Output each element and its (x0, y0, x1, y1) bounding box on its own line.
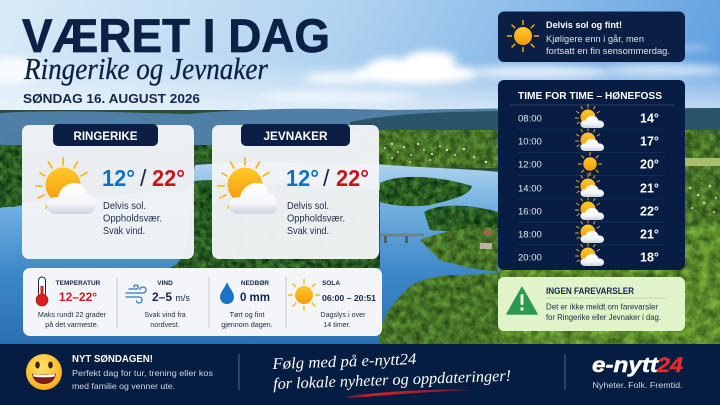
label: Jevnaker (241, 124, 350, 146)
description: Svak vind. (103, 225, 145, 237)
text: Sunday tip: Perfekt dag for tur, trening eller kos (72, 368, 213, 378)
icon: sun (288, 280, 320, 310)
rows: 18:00 (518, 230, 542, 240)
title: VÆRET I DAG (22, 10, 330, 63)
stat: sun: Dagslys i over (320, 310, 366, 319)
panel: summary (498, 12, 685, 62)
stat: sun (288, 280, 376, 329)
stat: wind: nordvest. (150, 320, 180, 329)
stat: wind: 2–5 m/s (152, 290, 190, 304)
stat: precipitation: Tørt og fint (230, 310, 264, 319)
description: Delvis sol. (103, 200, 146, 212)
icon: wind (126, 285, 146, 303)
temperatures: 22° (336, 165, 369, 191)
temperatures: 21° (640, 182, 659, 196)
icons: weather per hour (576, 104, 604, 266)
temperatures: 20° (640, 158, 659, 172)
icon: water drop (220, 282, 234, 304)
subtitle: Ringerike og Jevnaker (23, 51, 269, 86)
temperatures: 14° (640, 112, 659, 126)
label: Jevnaker: JEVNAKER (264, 131, 328, 143)
panel: hourly forecast: TIME FOR TIME – HØNEFOSS (518, 91, 662, 102)
land base (0, 110, 720, 345)
text: Sunday tip: med familie og venner ute. (72, 381, 175, 391)
temperatures: 12° (286, 165, 319, 191)
fields and town, far shore (360, 130, 500, 168)
stat: temperature: på det varmeste. (45, 320, 99, 329)
temperatures: 17° (640, 134, 659, 148)
label: Ringerike: RINGERIKE (74, 131, 138, 143)
description (287, 200, 345, 237)
forests (0, 145, 22, 208)
rows: 10:00 (518, 136, 542, 148)
panel: summary: fortsatt en fin sensommerdag. (546, 46, 670, 56)
icon: sun (508, 20, 538, 52)
panel: no warnings (498, 277, 685, 331)
text: Sunday tip (72, 354, 213, 391)
temperatures: / (323, 165, 330, 191)
panel: hourly forecast (498, 80, 685, 270)
rows: 16:00 (518, 206, 542, 218)
panel: no warnings: Det er ikke meldt om farevarsler (546, 302, 658, 312)
description: Svak vind. (287, 225, 329, 237)
stat: temperature: 12–22° (59, 290, 97, 304)
stat: temperature: TEMPERATUR (56, 280, 101, 287)
stat: sun: 06:00 – 20:51 (322, 293, 376, 303)
panel: no warnings: for Ringerike eller Jevnaker i dag. (546, 313, 661, 322)
stat: sun: SOLA (322, 280, 340, 287)
description: Oppholdsvær. (287, 212, 345, 224)
panel: summary: Kjøligere enn i går, men (546, 34, 644, 44)
rows: 12:00 (518, 160, 542, 170)
logo: Nyheter. Folk. Fremtid. (592, 381, 682, 390)
label: Ringerike (53, 124, 158, 146)
panel: summary: Delvis sol og fint! (546, 20, 622, 31)
panel: no warnings: INGEN FAREVARSLER (546, 286, 634, 296)
rows: 14:00 (518, 184, 542, 194)
date: SØNDAG 16. AUGUST 2026 (23, 91, 200, 106)
logo: 24 (656, 354, 683, 377)
water (0, 163, 500, 345)
stat: precipitation: 0 mm (240, 292, 270, 304)
icon: smiling emoji (26, 354, 62, 390)
logo: e-nytt (592, 354, 659, 377)
bridge (380, 234, 424, 236)
description: Oppholdsvær. (103, 212, 162, 224)
text: follow e-nytt24 (271, 348, 511, 393)
stat: precipitation (220, 280, 273, 329)
temperatures (102, 165, 185, 191)
description (103, 200, 162, 237)
stat: wind: VIND (157, 280, 173, 287)
temperatures: / (140, 165, 147, 191)
temperatures (640, 112, 659, 264)
panel: Jevnaker (212, 124, 379, 259)
stat: temperature (36, 277, 107, 329)
icon: sun behind cloud (218, 158, 278, 214)
logo (592, 354, 683, 390)
footer band (0, 344, 720, 405)
stat: precipitation: gjennom dagen. (221, 320, 273, 329)
temperatures: 18° (640, 250, 659, 264)
stat: wind: Svak vind fra (144, 310, 186, 319)
stat: temperature: Maks rundt 22 grader (38, 310, 107, 319)
rows (518, 114, 542, 264)
text: Sunday tip: NYT SØNDAGEN! (72, 354, 153, 365)
text: follow e-nytt24: Følg med på e-nytt24 (271, 351, 417, 373)
temperatures (286, 165, 369, 191)
stat: wind (126, 280, 190, 329)
temperatures: 22° (152, 165, 185, 191)
rows: 20:00 (518, 252, 542, 264)
temperatures: 21° (640, 228, 659, 242)
temperatures: 12° (102, 165, 135, 191)
icon: sun behind cloud (36, 158, 96, 214)
stat: sun: 14 timer. (323, 320, 351, 329)
text: follow e-nytt24: for lokale nyheter og oppdateringer! (273, 368, 511, 393)
icon: warning triangle (507, 288, 537, 314)
rows: 08:00 (518, 114, 542, 124)
stat: precipitation: NEDBØR (241, 280, 269, 287)
temperatures: 22° (640, 204, 659, 218)
panel: Ringerike (22, 124, 194, 259)
panel: daily stats (23, 268, 382, 336)
red underline (345, 390, 473, 398)
icon: thermometer (36, 277, 48, 306)
description: Delvis sol. (287, 200, 329, 212)
